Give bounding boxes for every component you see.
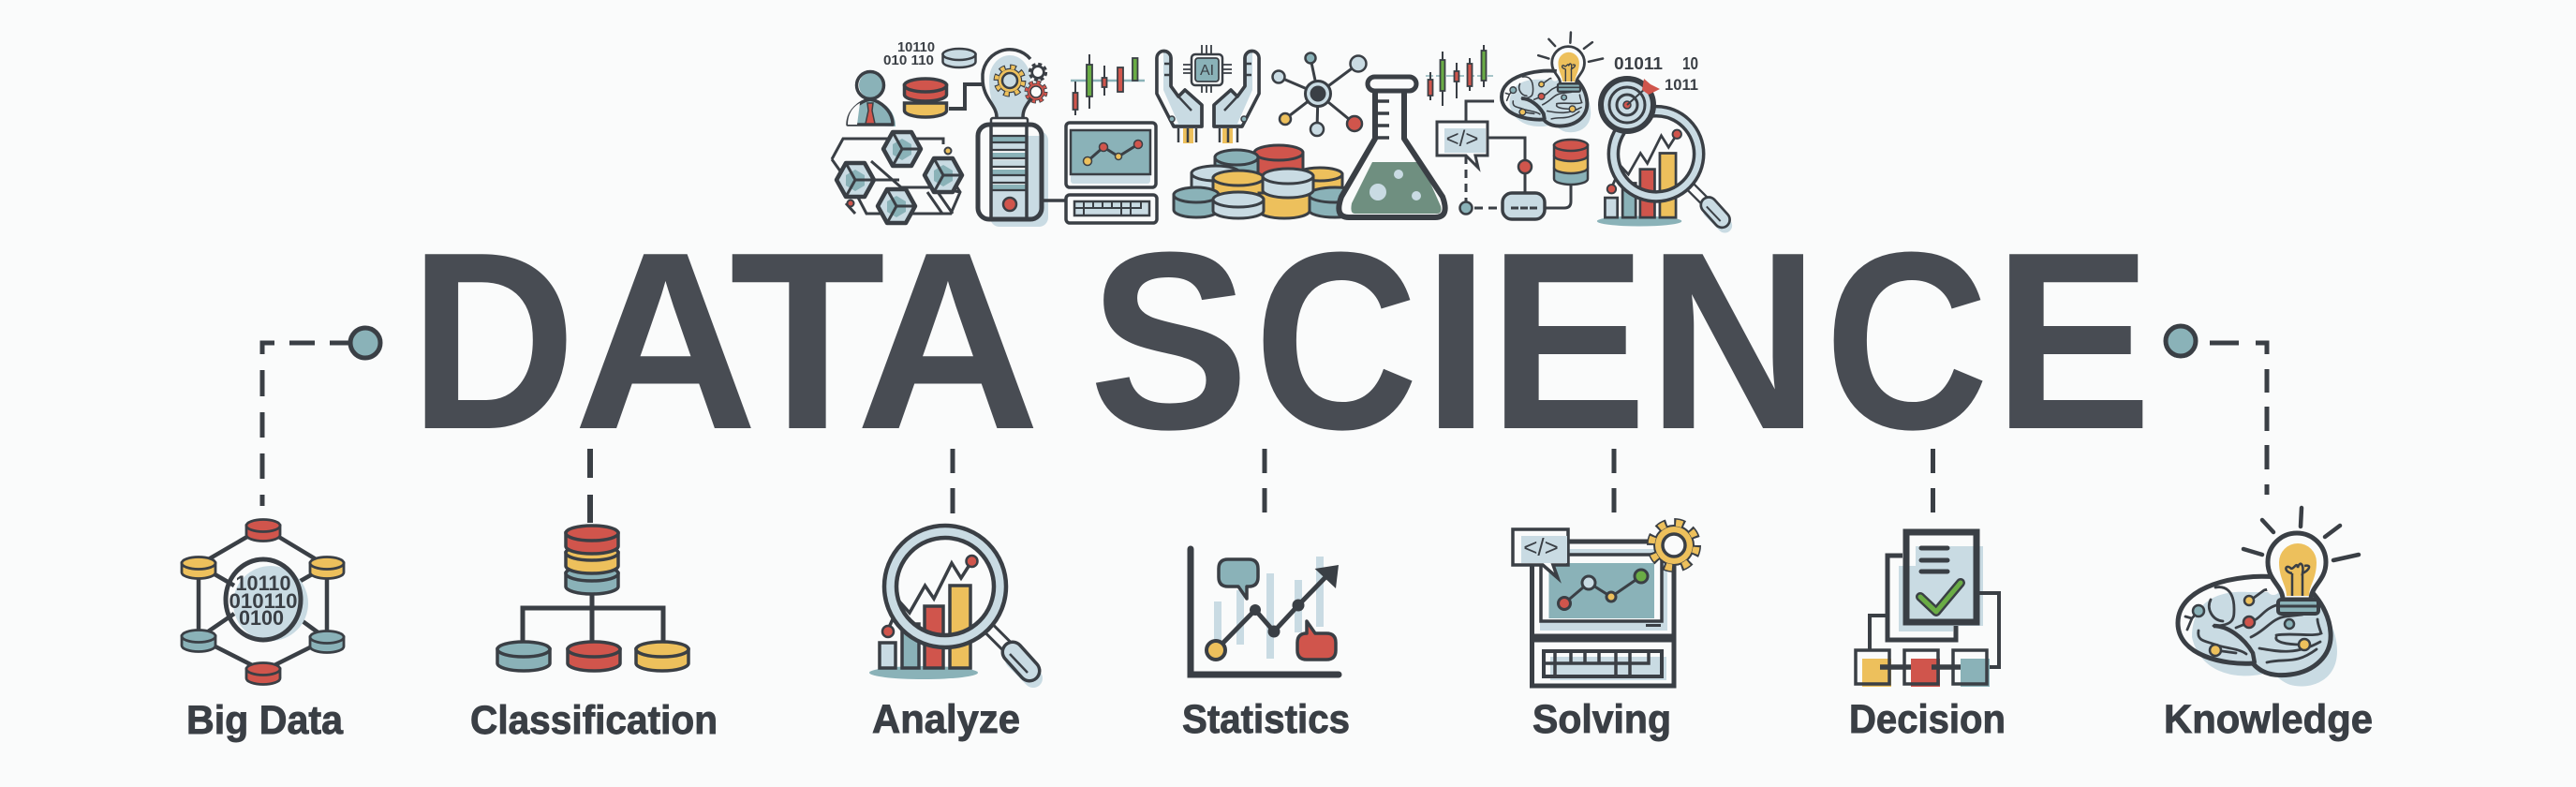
icon: light bulb with gears [983,50,1045,117]
panel: Analyze [869,526,1033,742]
panel: Big Data [182,519,344,743]
icon: big data network: 10110 [236,572,290,595]
title: DATA SCIENCE: N [1648,200,1819,483]
icon: candlestick chart 2 [1426,45,1493,106]
panel: Statistics [1182,549,1350,742]
connector: title to Statistics [1263,449,1266,512]
icon: magnifier over bar chart [869,526,1033,679]
label: Classification: Classification [470,698,718,743]
binary digits [1614,53,1698,94]
icon: binary digits and database [883,39,982,117]
title: DATA SCIENCE: D [409,200,576,483]
icon: brain with idea bulb [1502,33,1603,132]
icon: person [848,71,896,126]
panel: Decision [1849,532,2006,742]
icon: big data network: 010110 [229,589,298,613]
icon: AI chip in hands: AI [1200,63,1214,79]
connector: title to Decision [1931,449,1935,512]
icon: document decision flow [1856,532,1999,687]
title: DATA SCIENCE: E [1993,200,2152,483]
connector: title to Analyze [950,449,955,513]
icon: candlestick chart 1 [1071,54,1145,115]
title: DATA SCIENCE: S [1088,200,1250,483]
icon: chemistry flask [1339,77,1445,217]
icon: stacked coins [1174,145,1361,218]
icon: binary digits and database: 010 110 [883,52,934,68]
top illustration cluster [832,33,1725,227]
label: Solving: Solving [1532,697,1671,742]
connector: title to Solving [1611,449,1617,512]
title: DATA SCIENCE: C [1825,200,1989,483]
binary digits: 01011 [1614,53,1663,73]
title: DATA SCIENCE: A [573,200,758,483]
title: DATA SCIENCE: T [730,200,885,483]
panel: Solving [1513,523,1696,742]
title: DATA SCIENCE: E [1488,200,1647,483]
title: DATA SCIENCE [409,200,2152,483]
binary digits: 10 [1682,53,1698,73]
connector: title to Classification [587,449,593,523]
icon: magnifier over bar chart [1597,107,1725,226]
label: Statistics: Statistics [1182,697,1350,742]
label: Knowledge: Knowledge [2164,697,2373,742]
icon: molecule [1272,52,1366,136]
icon: AI chip in hands [1157,45,1259,143]
icon: computer with gear and code bubble: </> [1523,533,1559,561]
icon: code flow diagram: </> [1446,126,1478,152]
icon: brain with light bulb [2178,508,2359,687]
icon: big data network [182,519,344,684]
title: DATA SCIENCE: I [1423,200,1489,483]
label: Analyze: Analyze [872,697,1020,742]
icon: blockchain network [832,132,962,223]
icon: computer with gear and code bubble [1513,523,1696,686]
title: DATA SCIENCE: A [856,200,1040,483]
icon: code flow diagram [1437,101,1588,219]
icon: classification tree [497,526,688,671]
binary digits: 1011 [1665,76,1698,94]
icon: statistics chart [1191,549,1339,675]
icon: target with arrow [1601,79,1660,131]
icon: big data network: 0100 [239,606,284,630]
panel: Classification [470,526,718,743]
icon: computer tower [978,118,1066,227]
label: Big Data: Big Data [186,698,344,743]
connector: title to Big Data [262,328,380,506]
icon: binary digits and database: 10110 [897,39,935,55]
title: DATA SCIENCE: C [1254,200,1418,483]
connector: title to Knowledge [2166,326,2267,495]
label: Decision: Decision [1849,697,2006,742]
icon: monitor and keyboard [1066,123,1157,223]
panel: Knowledge [2164,508,2373,742]
